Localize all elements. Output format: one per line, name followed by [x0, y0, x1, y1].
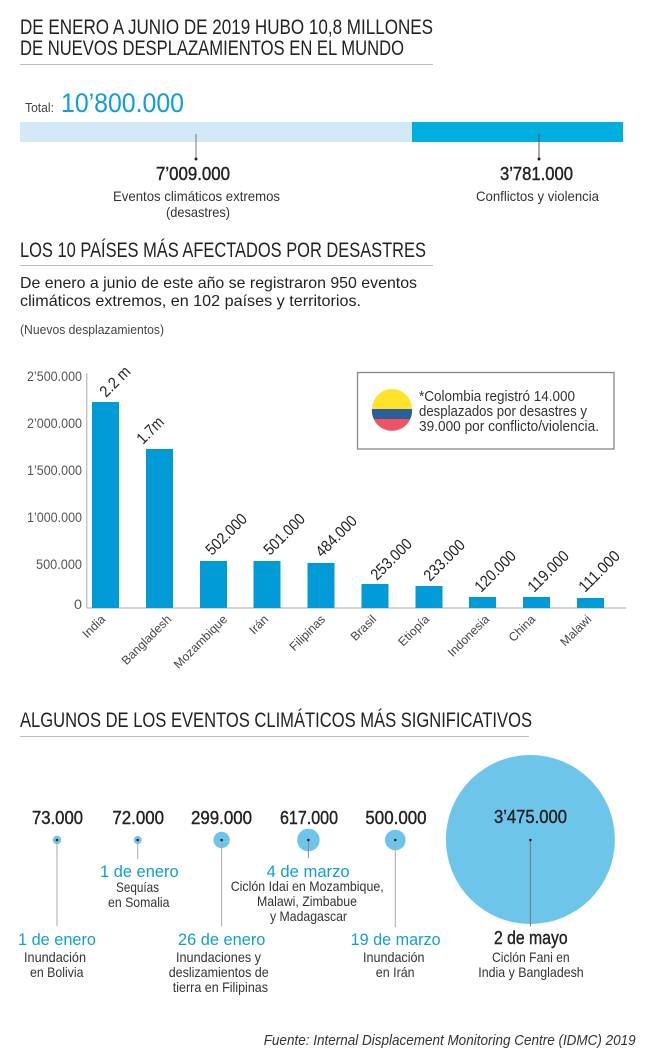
callout: conflict and violence: [476, 134, 599, 204]
event: Cyclone Fani: 2 de mayo: [494, 928, 568, 948]
event: Cyclone Fani: [446, 755, 615, 980]
country labels: Irán: [246, 612, 271, 637]
event: Somalia droughts: 72.000: [112, 808, 164, 828]
intro text: climáticos extremos, en 102 países y territorios.: [20, 293, 361, 310]
y axis labels: 500.000: [36, 557, 82, 572]
event: Cyclone Fani: 3’475.000: [494, 807, 567, 827]
total figure: 10’800.000: [61, 88, 184, 118]
callout: climate events: (desastres): [166, 204, 230, 220]
bar value labels: 120.000: [472, 548, 520, 596]
total figure: Total:: [25, 100, 54, 115]
callout: Colombia: *Colombia registró 14.000: [419, 389, 575, 405]
event: Cyclone Fani: Ciclón Fani en: [492, 949, 570, 965]
bar value labels: 119.000: [525, 548, 573, 596]
callout: conflict and violence: 3’781.000: [500, 164, 573, 184]
callout: climate events: [113, 134, 280, 220]
intro text: [20, 275, 417, 310]
country labels: Filipinas: [287, 612, 328, 654]
callout: climate events: 7’009.000: [156, 164, 230, 184]
y axis labels: 1’000.000: [27, 510, 82, 525]
event: Cyclone Idai: [231, 808, 384, 924]
y axis labels: 2’000.000: [27, 416, 82, 431]
icon: Colombian flag circle: [372, 389, 412, 431]
intro text: De enero a junio de este año se registraron 950 eventos: [20, 275, 417, 292]
event: Somalia droughts: en Somalia: [108, 894, 170, 910]
event: Bolivia flood: 1 de enero: [18, 930, 96, 949]
bar value labels: 1.7m: [134, 414, 168, 448]
country labels: Etiopía: [395, 612, 432, 649]
callout: Colombia: 39.000 por conflicto/violencia.: [419, 419, 599, 435]
title: DE ENERO A JUNIO DE 2019 HUBO 10,8 MILLONES: [20, 16, 433, 39]
event: Somalia droughts: [100, 808, 179, 910]
event: Iran flood: 500.000: [365, 808, 427, 828]
callout: Colombia: [358, 372, 614, 449]
event: Philippines floods: 299.000: [191, 808, 252, 828]
event: Cyclone Idai: y Madagascar: [270, 908, 347, 924]
y axis labels: [27, 369, 82, 612]
bars: [92, 402, 604, 608]
country labels: Mozambique: [171, 612, 230, 671]
event: Somalia droughts: Sequías: [116, 879, 159, 895]
event: Somalia droughts: 1 de enero: [100, 862, 179, 881]
stacked total bar: [20, 122, 623, 142]
event: Bolivia flood: 73.000: [32, 808, 83, 828]
event: Cyclone Idai: Ciclón Idai en Mozambique,: [231, 878, 384, 894]
bar value labels: [97, 363, 624, 596]
country labels: China: [506, 612, 538, 645]
callout: conflict and violence: Conflictos y violencia: [476, 188, 599, 204]
event: Iran flood: Inundación: [363, 949, 424, 965]
event: Philippines floods: 26 de enero: [178, 930, 265, 949]
country labels: Indonesia: [445, 612, 492, 659]
bar value labels: 253.000: [368, 536, 416, 584]
event: Iran flood: 19 de marzo: [351, 930, 441, 949]
event: Cyclone Idai: Malawi, Zimbabue: [257, 893, 357, 909]
event: Cyclone Idai: 4 de marzo: [267, 862, 350, 881]
country labels: Brasil: [348, 612, 379, 644]
bar value labels: 111.000: [576, 548, 624, 596]
bar value labels: 233.000: [421, 537, 469, 585]
bar value labels: 484.000: [313, 513, 361, 561]
event: Cyclone Fani: India y Bangladesh: [478, 964, 584, 980]
country labels: [80, 612, 594, 671]
bar value labels: 2.2 m: [97, 363, 134, 401]
bar chart: [27, 363, 626, 671]
callout: climate events: Eventos climáticos extremos: [113, 188, 280, 204]
event: Bolivia flood: Inundación: [24, 949, 86, 965]
event: Philippines floods: tierra en Filipinas: [173, 979, 268, 995]
event: Philippines floods: [169, 808, 269, 995]
callout: Colombia: desplazados por desastres y: [419, 404, 588, 420]
event: Iran flood: en Irán: [376, 964, 415, 980]
bar value labels: 502.000: [203, 511, 251, 559]
unit note: (Nuevos desplazamientos): [20, 322, 164, 337]
title: [20, 16, 433, 60]
event: Bolivia flood: en Bolivia: [30, 964, 84, 980]
country labels: Bangladesh: [119, 612, 174, 668]
country labels: Malawi: [557, 612, 594, 649]
country labels: India: [80, 612, 108, 641]
bar value labels: 501.000: [261, 511, 309, 559]
event: Bolivia flood: [18, 808, 96, 980]
heading: top 10 countries: LOS 10 PAÍSES MÁS AFECTADOS POR DESASTRES: [20, 239, 426, 262]
event: Philippines floods: deslizamientos de: [169, 964, 269, 980]
y axis labels: 1’500.000: [27, 463, 82, 478]
y axis labels: 0: [74, 597, 82, 612]
event: Iran flood: [351, 808, 441, 980]
title: DE NUEVOS DESPLAZAMIENTOS EN EL MUNDO: [20, 37, 404, 60]
event: Cyclone Idai: 617.000: [280, 808, 338, 828]
event: Philippines floods: Inundaciones y: [176, 949, 261, 965]
y axis labels: 2’500.000: [27, 369, 82, 384]
